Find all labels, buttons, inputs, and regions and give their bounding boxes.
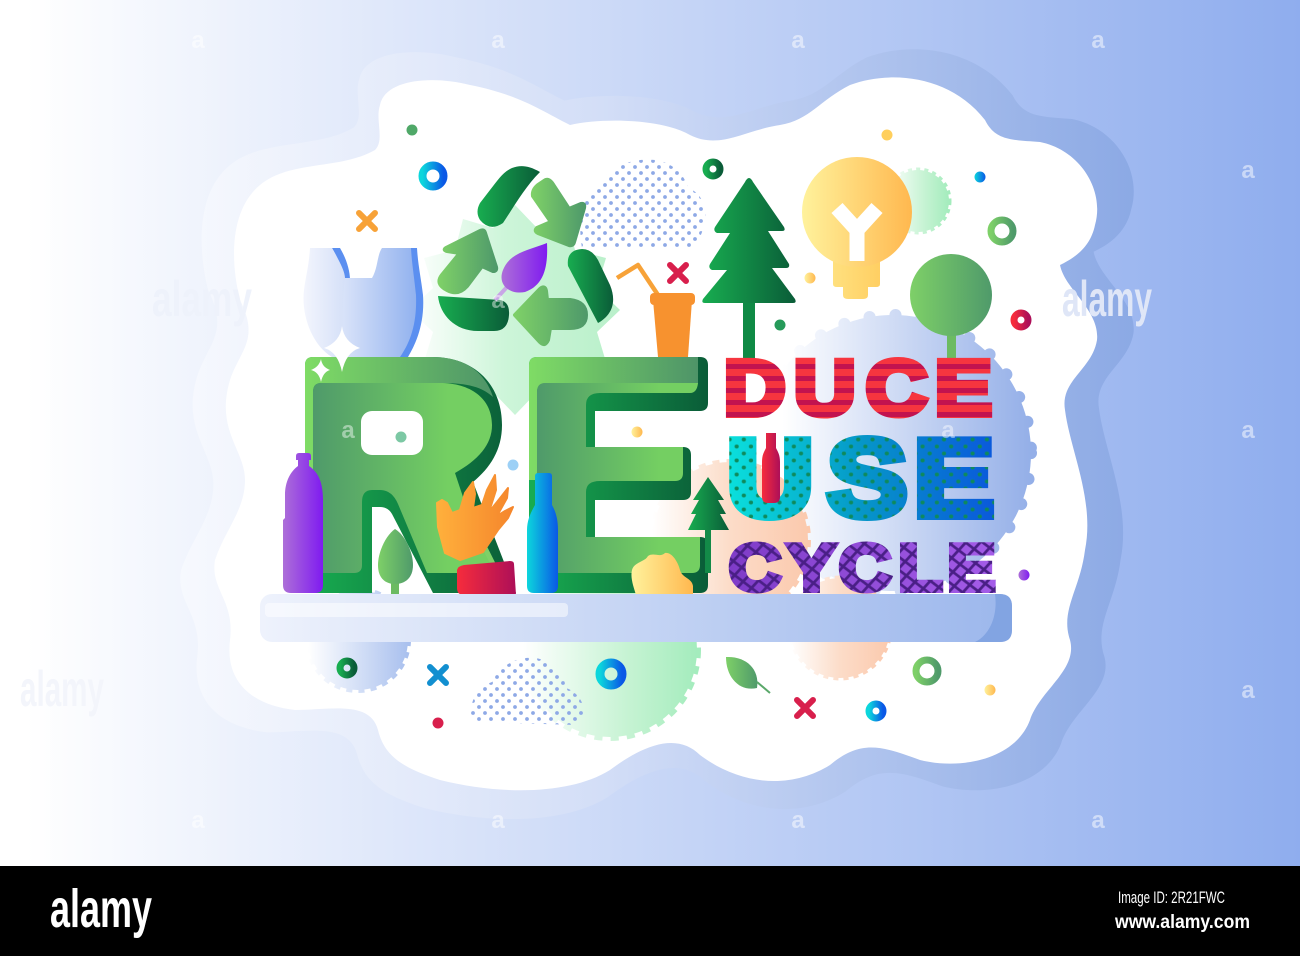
watermark letters over artwork: a (341, 417, 355, 444)
word: CYCLE: CYCLE (729, 532, 995, 604)
red bottle inside U (762, 433, 780, 503)
round tree (910, 254, 992, 360)
halftone cloud top (580, 160, 705, 248)
halftone cloud bottom (471, 658, 584, 725)
E lighter top band (529, 357, 698, 480)
watermark pattern: a (1091, 807, 1105, 834)
burst: peach under shelf (790, 578, 890, 678)
E dark extrusion (529, 357, 708, 593)
R dark extrusion (305, 357, 516, 593)
pine tree (702, 178, 796, 360)
plastic bag (304, 248, 423, 357)
watermark letters over artwork: a (491, 287, 505, 314)
watermark pattern: a (1091, 27, 1105, 54)
recycling arrow left (439, 230, 496, 292)
recycling band bottom (438, 296, 509, 331)
image id: Image ID: 2R21FWC (1118, 888, 1225, 907)
watermark letters over artwork (341, 287, 955, 444)
purple bottle (283, 453, 323, 593)
watermark words: alamy (152, 271, 252, 327)
yellow crumpled paper (631, 553, 693, 595)
watermark words: alamy (1062, 271, 1152, 327)
decorative crosses (359, 213, 813, 716)
watermark pattern: a (791, 807, 805, 834)
R lighter top band (305, 357, 493, 490)
sparkles (311, 326, 360, 382)
recycling band top (478, 166, 540, 227)
watermark pattern: a (1241, 417, 1255, 444)
website: www.alamy.com (1114, 912, 1250, 933)
blue bottle (527, 473, 558, 593)
watermark pattern: a (1241, 157, 1255, 184)
R counter (361, 411, 423, 455)
burst: blue under shelf (308, 590, 408, 690)
light bulb (802, 157, 912, 299)
recycling arrow top right (533, 180, 584, 245)
small pine tree (688, 477, 729, 573)
watermark pattern: a (191, 27, 205, 54)
recycling arrow bottom (515, 287, 586, 344)
burst: behind light bulb (887, 170, 949, 232)
letter E (529, 357, 708, 593)
watermark letters over artwork: a (941, 417, 955, 444)
letter R (305, 357, 516, 593)
green leaf (726, 657, 770, 693)
burst: green under shelf (523, 563, 697, 737)
R front face (313, 383, 493, 573)
E front face (537, 383, 700, 573)
purple leaf (495, 243, 547, 300)
burst: peach behind words (652, 462, 808, 618)
word: DUCE: DUCE (724, 346, 992, 432)
watermark pattern: a (1241, 677, 1255, 704)
watermark pattern: a (191, 807, 205, 834)
red cup on its side (457, 561, 516, 597)
decorative rings (340, 162, 1028, 718)
gear: large blue behind words (755, 315, 1031, 591)
shelf (260, 594, 1012, 642)
shelf highlight (265, 603, 568, 617)
footer logo: alamy (50, 879, 152, 939)
cup with straw (617, 265, 695, 357)
watermark words: alamy (20, 661, 104, 717)
word: USE: USE (727, 418, 994, 539)
watermark pattern (191, 27, 1255, 834)
burst: recycling backdrop (410, 205, 620, 415)
recycling band right (568, 249, 613, 323)
decorative dots (396, 124, 1030, 728)
watermark pattern: a (791, 27, 805, 54)
watermark words (20, 271, 1152, 717)
watermark pattern: a (491, 27, 505, 54)
small round tree (378, 529, 413, 594)
cloud halo shadow (180, 49, 1134, 819)
footer bar (0, 866, 1300, 956)
watermark pattern: a (491, 807, 505, 834)
white cloud panel (214, 77, 1097, 790)
hand (437, 475, 513, 566)
recycling symbol (438, 166, 613, 344)
